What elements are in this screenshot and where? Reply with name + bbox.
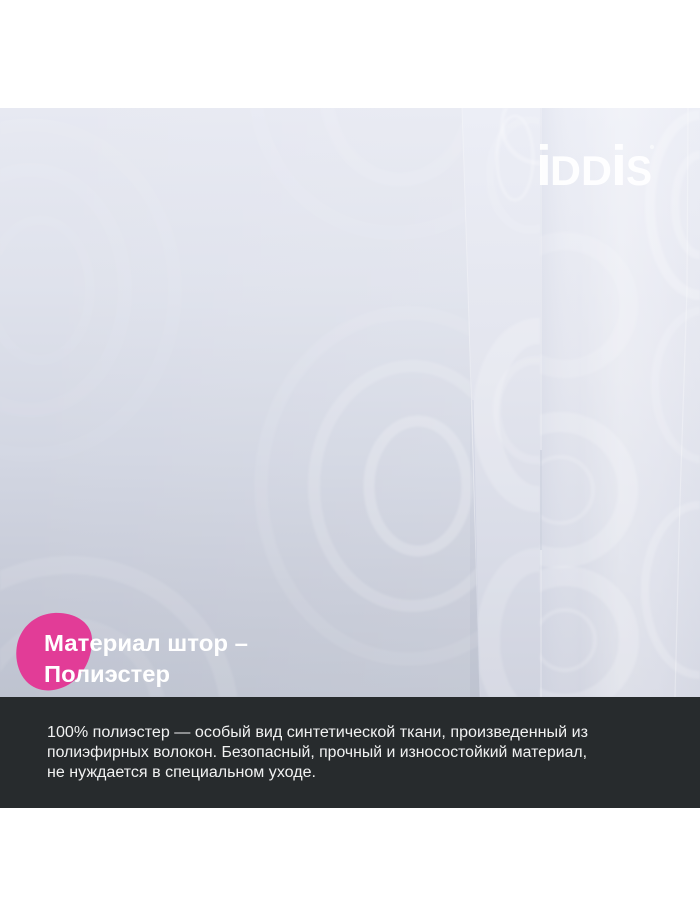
heading: [44, 630, 248, 687]
text block: description: 100% полиэстер — особый вид синтетической ткани, произведенный из: [47, 724, 588, 741]
photo: white curtain fabric with ring pattern: [0, 108, 700, 697]
panel: dark description band: [0, 697, 700, 808]
seams: [462, 108, 480, 697]
text block: description: не нуждается в специальном уходе.: [47, 764, 316, 781]
text block: description: [47, 724, 588, 781]
logo: iddis: i: [611, 134, 627, 198]
heading: Полиэстер: [44, 661, 170, 687]
logo: iddis: [536, 134, 654, 198]
logo: iddis: DD: [550, 147, 612, 194]
accent: pink blob: [16, 613, 92, 690]
logo: iddis: S: [626, 147, 652, 194]
text block: description: полиэфирных волокон. Безопасный, прочный и износостойкий материал,: [47, 744, 587, 761]
logo: iddis: i: [536, 134, 552, 198]
heading: Материал штор –: [44, 630, 248, 656]
